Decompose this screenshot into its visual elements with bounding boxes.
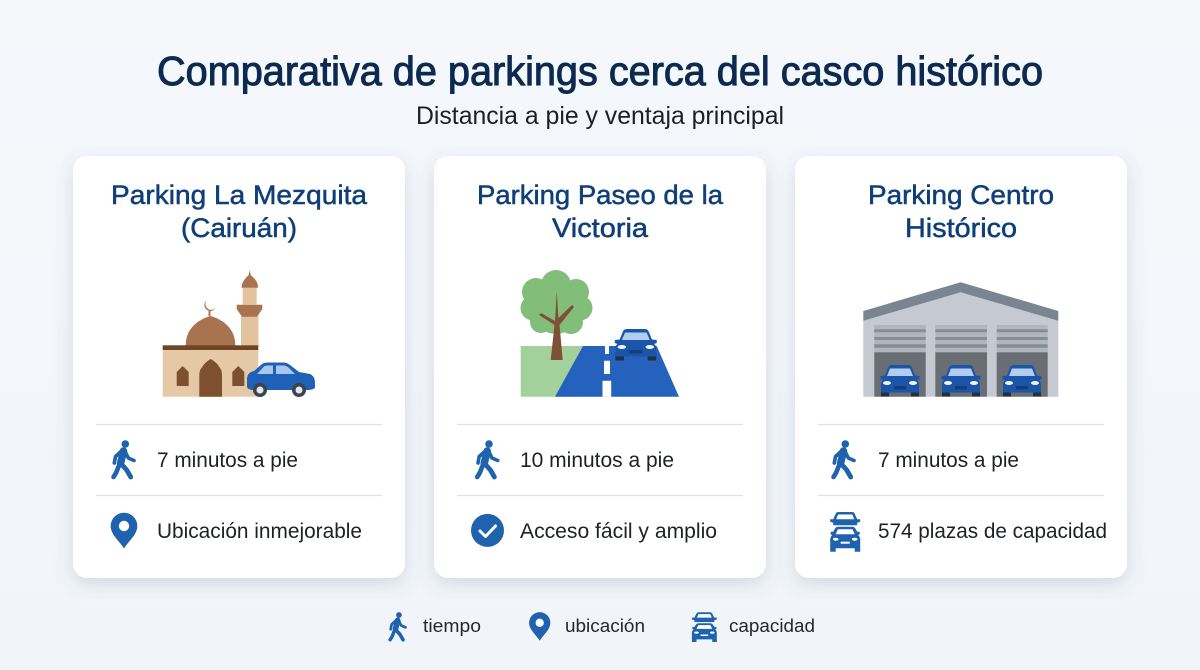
legend label: location: ubicación (565, 616, 645, 636)
icon: tree and road with car (520, 270, 679, 397)
legend icon: location (529, 612, 550, 641)
heading: Parking Paseo de la Victoria: Victoria (552, 213, 648, 243)
text: capacity: 574 plazas de capacidad (878, 520, 1107, 543)
icon: walking (114, 440, 134, 477)
panel: Parking La Mezquita (73, 156, 405, 578)
heading: Parking Paseo de la Victoria (477, 180, 723, 243)
panel: Parking Centro Histórico (795, 156, 1127, 578)
icon: parking garage (863, 282, 1058, 397)
panel: Parking Paseo de la Victoria (434, 156, 766, 578)
heading: Parking La Mezquita (111, 180, 367, 243)
heading: Parking La Mezquita: Parking La Mezquita (111, 180, 367, 210)
subtitle: Distancia a pie y ventaja principal (416, 102, 784, 130)
icon: mosque with car (163, 270, 315, 397)
heading: Parking Centro Histórico (868, 180, 1054, 243)
legend (390, 612, 815, 642)
legend icon: time (390, 612, 406, 640)
heading: Parking Centro Histórico: Histórico (905, 213, 1017, 243)
text: walking time: 7 minutos a pie (157, 449, 298, 472)
legend icon: capacity (692, 612, 717, 642)
text: walking time: 7 minutos a pie (878, 449, 1019, 472)
text: main advantage: Ubicación inmejorable (157, 520, 362, 543)
heading: Parking La Mezquita: (Cairuán) (181, 213, 297, 243)
icon: walking (834, 440, 854, 477)
title: Comparativa de parkings cerca del casco histórico (157, 48, 1043, 94)
legend label: capacity: capacidad (729, 616, 815, 636)
icon: walking (477, 440, 498, 477)
legend label: time: tiempo (423, 616, 481, 636)
heading: Parking Paseo de la Victoria: Parking Paseo de la (477, 180, 723, 210)
icon: check badge (471, 514, 504, 547)
text: walking time: 10 minutos a pie (520, 449, 674, 472)
icon: location pin (111, 513, 137, 548)
heading: Parking Centro Histórico: Parking Centro (868, 180, 1054, 210)
icon: stacked cars (830, 512, 860, 552)
text: main advantage: Acceso fácil y amplio (520, 520, 717, 543)
